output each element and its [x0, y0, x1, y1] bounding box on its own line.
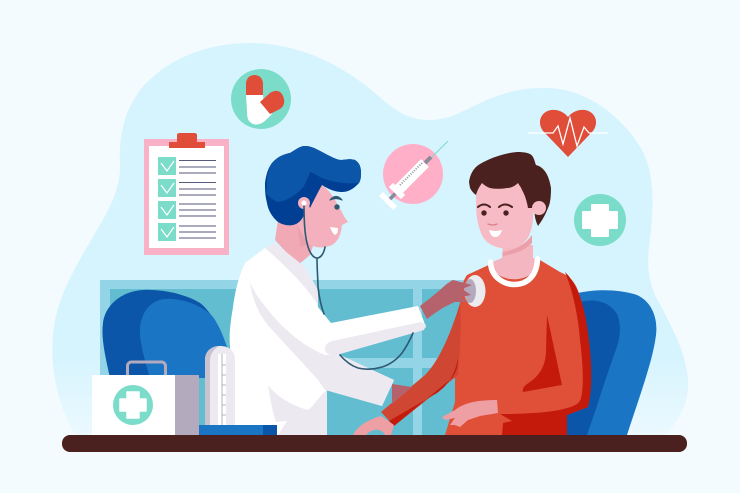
stethoscope chest piece [464, 275, 486, 307]
background blob [52, 43, 688, 435]
blood pressure monitor [199, 346, 277, 435]
patient neck [490, 245, 540, 279]
icon: heart with pulse line [528, 110, 608, 157]
doctor hand [420, 280, 472, 319]
right chair [560, 290, 656, 435]
patient head [469, 152, 551, 256]
coat forearm shading [324, 323, 426, 356]
icon: medical cross [574, 194, 626, 246]
coat sleeve shading [250, 282, 394, 406]
patient sweater [445, 260, 590, 435]
doctor head [265, 146, 361, 247]
window [100, 280, 467, 435]
checklist row 3 [158, 201, 216, 219]
doctor hair [265, 146, 361, 225]
doctor [230, 146, 426, 435]
icon: syringe [381, 141, 448, 208]
coat collar [265, 243, 318, 305]
table [62, 435, 687, 452]
doctor neck [275, 205, 314, 265]
stethoscope [304, 206, 413, 369]
patient [353, 152, 591, 435]
first aid kit [92, 362, 199, 435]
clipboard [144, 133, 229, 255]
patient hand on lap [442, 400, 498, 427]
checklist row 2 [158, 179, 216, 197]
patient hand on table [353, 416, 394, 435]
sweater shadows [500, 272, 591, 435]
doctor coat [230, 243, 426, 435]
icon: pills [231, 69, 291, 129]
patient arm [381, 303, 461, 426]
checklist row 1 [158, 157, 216, 175]
left chair [102, 290, 235, 378]
collar [490, 259, 538, 284]
patient hair [469, 152, 551, 226]
coat hem shading [268, 385, 327, 435]
doctor back hand [392, 384, 412, 404]
checklist row 4 [158, 223, 216, 241]
